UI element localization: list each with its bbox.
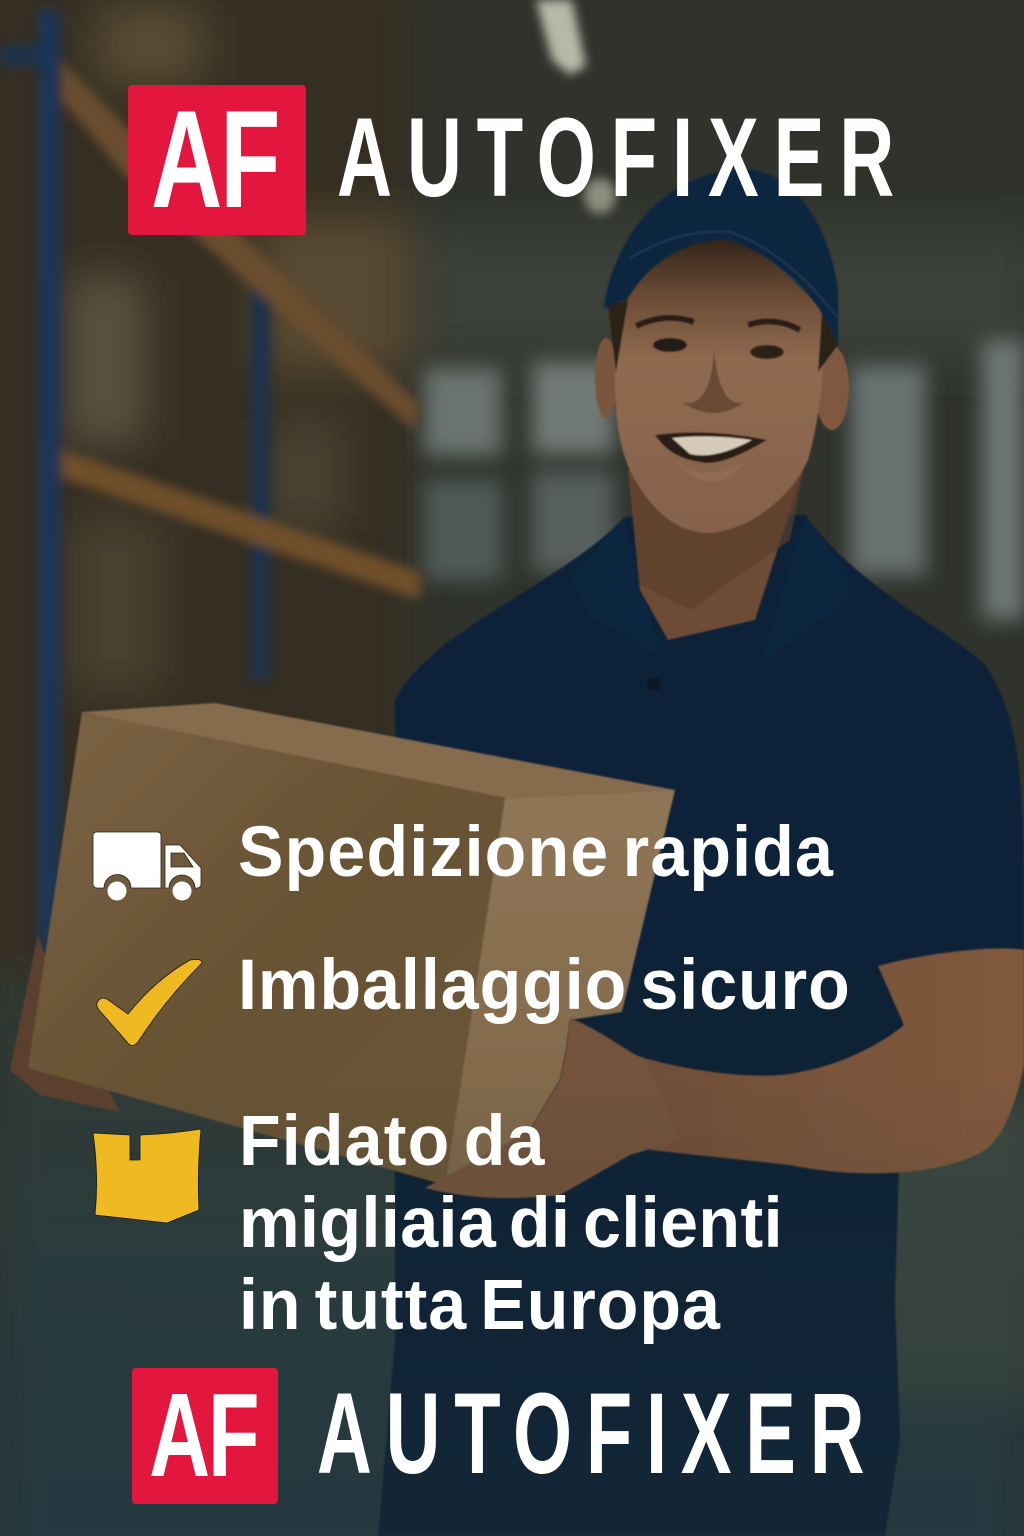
top logo xyxy=(128,82,909,237)
cardboard box xyxy=(28,703,675,1185)
text: Spedizione rapida: Spedizione rapida xyxy=(238,813,834,892)
text: Fidato da migliaia di clienti in tutta Europa xyxy=(238,1102,782,1345)
brand name: AUTOFIXER xyxy=(337,95,909,220)
logo badge: AF xyxy=(128,85,306,235)
courier cap xyxy=(604,169,838,345)
feature: fast shipping xyxy=(92,813,834,900)
text: Imballaggio sicuro: Imballaggio sicuro xyxy=(238,946,851,1025)
text: Fidato da migliaia di clienti in tutta Europa: in tutta Europa xyxy=(238,1266,720,1345)
icon: check mark xyxy=(96,959,202,1046)
bottom logo xyxy=(132,1368,878,1504)
feature: trusted by customers xyxy=(92,1102,782,1345)
brand name: AUTOFIXER xyxy=(317,1370,878,1498)
icon: truck xyxy=(92,832,202,900)
feature: secure packaging xyxy=(96,946,851,1046)
courier neck and head xyxy=(595,235,849,640)
icon: package xyxy=(92,1128,202,1224)
courier torso in navy polo xyxy=(378,515,1024,1536)
logo badge: AF: AF xyxy=(149,1369,258,1502)
text: Fidato da migliaia di clienti in tutta Europa: migliaia di clienti xyxy=(238,1184,782,1263)
courier arm and hand xyxy=(10,935,1024,1173)
text: Fidato da migliaia di clienti in tutta Europa: Fidato da xyxy=(238,1102,545,1181)
logo badge: AF: AF xyxy=(151,82,279,237)
courier hand over box xyxy=(425,1018,680,1198)
